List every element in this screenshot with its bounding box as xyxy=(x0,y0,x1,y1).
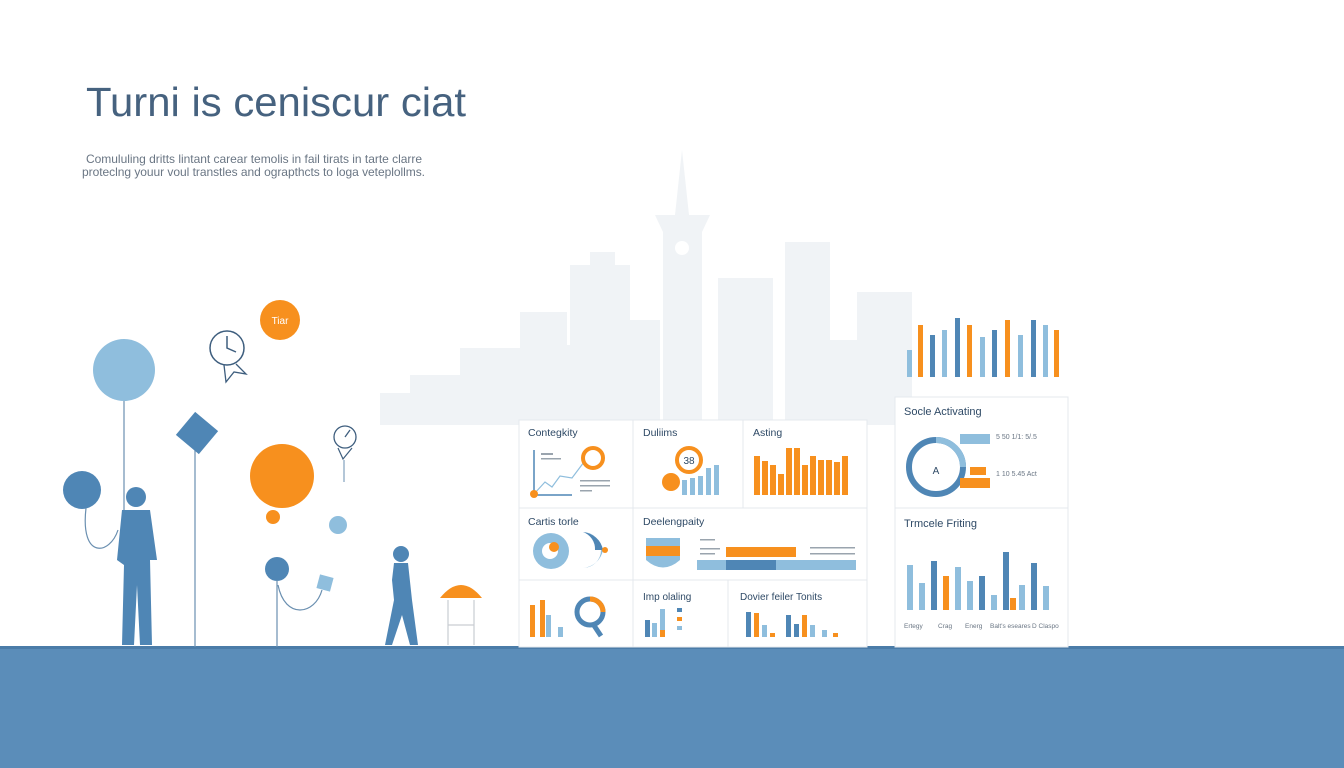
panel: Imp olaling: Imp olaling xyxy=(643,592,691,603)
panel: Contegkity xyxy=(528,427,610,498)
top right bar chart xyxy=(907,318,1059,377)
panel: Socle Activating: A xyxy=(933,466,940,477)
skyline background xyxy=(380,150,912,425)
panel: Cartis torle xyxy=(528,516,608,569)
woman silhouette xyxy=(385,546,418,645)
panel: Trmcele Friting: Ertegy xyxy=(904,623,924,630)
panel: bottom left xyxy=(530,599,603,637)
panel: Socle Activating: Socle Activating xyxy=(904,406,982,418)
subtitle xyxy=(82,152,425,179)
panel: Asting: Asting xyxy=(753,427,782,439)
panel: Socle Activating xyxy=(895,397,1068,508)
panel: Duliims xyxy=(643,427,719,495)
illustration: balloons and people xyxy=(63,300,482,647)
panel: Socle Activating: 5 50 1/1: 5/.5 xyxy=(996,434,1037,441)
man silhouette xyxy=(117,487,157,645)
panel: Cartis torle: Cartis torle xyxy=(528,516,579,528)
panel: Contegkity: Contegkity xyxy=(528,427,578,439)
panel: Duliims: 38 xyxy=(683,456,695,467)
subtitle: Comululing dritts lintant carear temolis in fail tirats in tarte clarre xyxy=(86,152,422,166)
panel: Trmcele Friting: Energ xyxy=(965,623,983,630)
subtitle: proteclng youur voul transtles and ograpthcts to loga veteplollms. xyxy=(82,165,425,179)
title: Turni is ceniscur ciat xyxy=(86,79,467,125)
dashboard grid xyxy=(519,420,867,647)
panel: Trmcele Friting: Balt's eseares xyxy=(990,623,1031,630)
panel: Socle Activating: 1 10 5.45 Act xyxy=(996,471,1037,478)
panel: Deelengpaity xyxy=(643,516,856,570)
panel: Trmcele Friting: D Claspo xyxy=(1032,623,1059,630)
floor xyxy=(0,647,1344,768)
panel: Trmcele Friting: Trmcele Friting xyxy=(904,518,977,530)
panel: Imp olaling xyxy=(643,592,691,637)
panel: Dovier feiler Tonits xyxy=(740,592,838,637)
panel: Trmcele Friting xyxy=(895,508,1068,647)
panel: Asting xyxy=(753,427,848,495)
panel: Deelengpaity: Deelengpaity xyxy=(643,516,705,528)
panel: Duliims: Duliims xyxy=(643,427,677,439)
illustration: balloons and people: Tiar xyxy=(272,316,289,327)
panel: Dovier feiler Tonits: Dovier feiler Tonits xyxy=(740,592,822,603)
panel: Trmcele Friting: Crag xyxy=(938,623,952,630)
